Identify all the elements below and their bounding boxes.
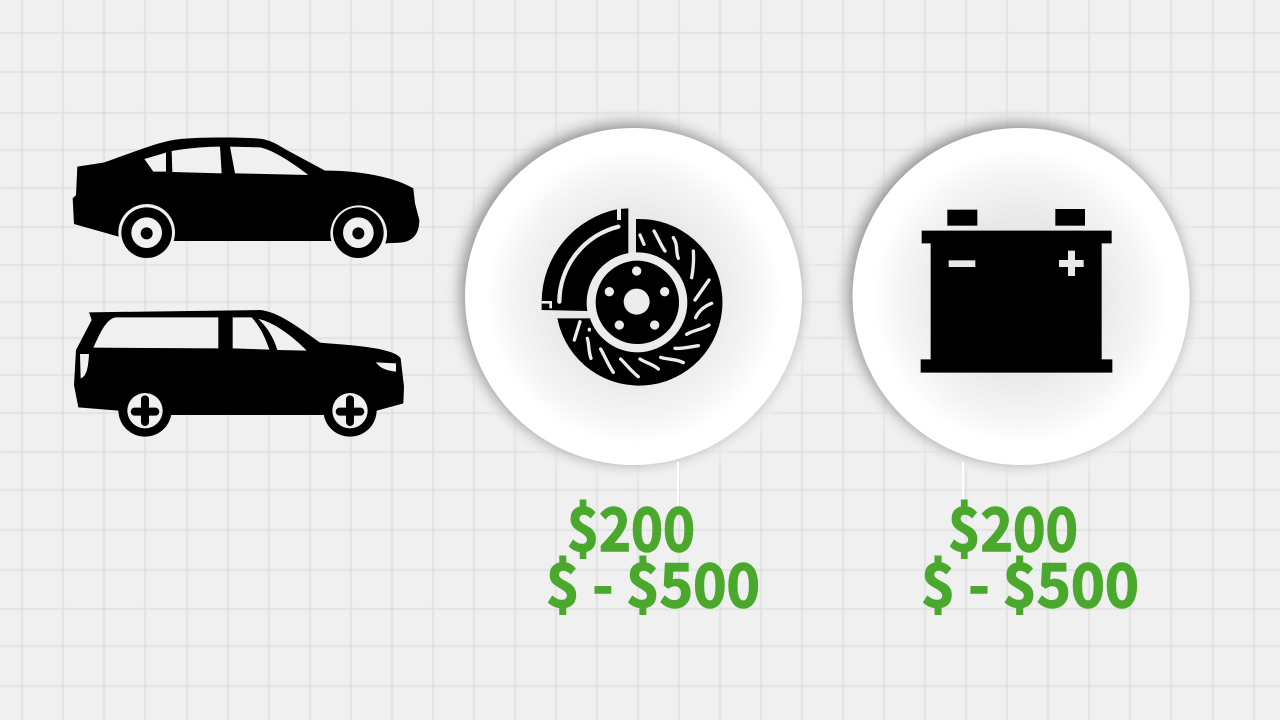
price: battery bbox=[921, 482, 1139, 625]
price: battery: $200 bbox=[948, 482, 1078, 569]
connector: battery price line bbox=[962, 462, 964, 506]
panel: brake disc circle bbox=[450, 112, 818, 480]
icon: brake disc bbox=[542, 208, 722, 386]
price: brake bbox=[546, 482, 760, 625]
connector: brake price line bbox=[677, 462, 679, 506]
icon: SUV car bbox=[74, 310, 404, 437]
price: brake: $ - $500 bbox=[546, 538, 760, 625]
icon: sedan car bbox=[73, 138, 419, 258]
icon: car battery bbox=[921, 209, 1112, 373]
price: brake: $200 bbox=[567, 482, 695, 569]
panel: battery circle bbox=[837, 112, 1205, 480]
price: battery: $ - $500 bbox=[921, 538, 1139, 625]
